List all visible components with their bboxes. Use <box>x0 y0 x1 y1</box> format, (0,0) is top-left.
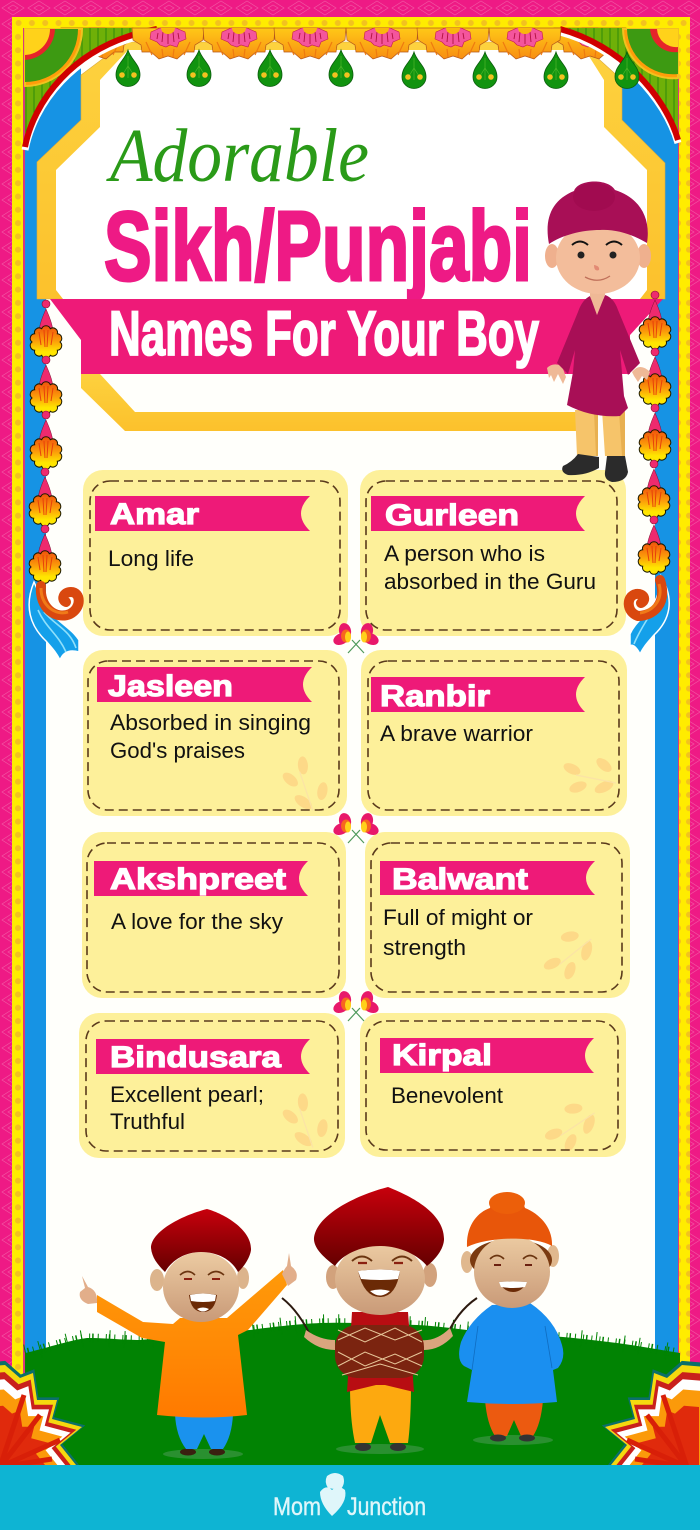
logo word: Junction: Junction <box>347 1493 426 1521</box>
trousers <box>485 1400 543 1436</box>
corner sunburst flowers <box>0 1361 700 1467</box>
hands <box>547 364 566 384</box>
name card: Bindusara: Bindusara <box>110 1041 281 1074</box>
name card: Jasleen: Absorbed in singing <box>110 710 311 735</box>
name card: Bindusara: Truthful <box>110 1109 185 1134</box>
vest <box>347 1312 414 1392</box>
name card: Balwant <box>365 832 630 998</box>
title frame <box>37 42 665 431</box>
shadow <box>336 1444 424 1454</box>
footer band <box>0 1465 700 1530</box>
name card: Bindusara <box>79 1013 345 1158</box>
mouth <box>499 1282 527 1292</box>
boy in orange kurta pointing up <box>80 1209 297 1459</box>
name card: Jasleen: Jasleen <box>108 670 233 703</box>
right scroll ornament <box>629 576 669 654</box>
end marigolds behind the arch <box>61 28 626 59</box>
name card: Jasleen <box>83 650 347 817</box>
name card: Ranbir: A brave warrior <box>380 721 534 746</box>
ears <box>461 1251 473 1273</box>
name card: Kirpal <box>360 1013 626 1160</box>
title <box>50 114 663 374</box>
name card: Amar: Long life <box>108 546 194 571</box>
title line: Adorable: Adorable <box>105 114 369 198</box>
ears <box>326 1265 340 1289</box>
flower dividers between cards <box>331 622 381 1021</box>
shoes <box>180 1448 196 1456</box>
name card: Kirpal: Benevolent <box>391 1083 504 1108</box>
eyes and brows <box>352 1256 412 1261</box>
logo word: Mom: Mom <box>273 1493 321 1521</box>
name card: Gurleen: absorbed in the Guru <box>384 569 596 594</box>
name card: Amar: Amar <box>110 498 199 531</box>
name card: Balwant: Full of might or <box>383 905 533 930</box>
name card: Akshpreet: Akshpreet <box>110 863 286 896</box>
grass field <box>25 1323 680 1470</box>
trousers <box>175 1414 233 1449</box>
neck <box>590 285 606 315</box>
shadow <box>473 1435 553 1445</box>
name card: Akshpreet <box>82 832 346 998</box>
ears <box>150 1269 164 1291</box>
eyes and brows <box>578 252 584 258</box>
name card: Kirpal: Kirpal <box>392 1039 492 1072</box>
eyes and brows <box>180 1272 224 1275</box>
face <box>163 1252 239 1322</box>
name card: Gurleen: A person who is <box>384 541 545 566</box>
mouth <box>358 1270 400 1297</box>
mouth <box>189 1294 217 1312</box>
arms <box>304 1328 453 1350</box>
name card: Akshpreet: A love for the sky <box>111 909 284 934</box>
hair <box>470 1239 552 1281</box>
hanging green leaves <box>116 50 639 88</box>
name card: Gurleen <box>360 470 626 636</box>
left hanging garland <box>29 300 62 583</box>
nose and smile <box>594 265 599 270</box>
name card: Balwant: strength <box>383 935 466 960</box>
name card: Balwant: Balwant <box>392 863 528 896</box>
name card: Ranbir <box>361 650 627 816</box>
name card: Bindusara: Excellent pearl; <box>110 1082 264 1107</box>
shadow <box>163 1449 243 1459</box>
kurta with raised arms <box>97 1270 287 1418</box>
turban <box>548 181 648 244</box>
right flower <box>602 1361 700 1467</box>
boy in blue kurta <box>459 1192 563 1445</box>
name card: Gurleen: Gurleen <box>385 499 519 532</box>
sticks <box>282 1298 477 1341</box>
name card: Jasleen: God's praises <box>110 738 245 763</box>
drum <box>335 1325 424 1378</box>
MomJunction logo <box>273 1473 426 1521</box>
hands <box>80 1276 97 1304</box>
kurta <box>459 1303 563 1404</box>
face <box>335 1243 425 1315</box>
ribbon banner <box>50 299 663 374</box>
title line: Sikh/Punjabi: Sikh/Punjabi <box>104 191 532 301</box>
boy playing dhol drum <box>282 1187 477 1454</box>
shoes <box>490 1434 506 1442</box>
right hanging garland <box>638 291 671 574</box>
turban <box>467 1198 552 1247</box>
kurta <box>557 295 640 416</box>
logo icon: mother and child heart <box>320 1473 345 1516</box>
ears <box>545 244 559 268</box>
left scroll ornament <box>29 582 79 660</box>
name card: Amar <box>83 470 348 636</box>
left flower <box>0 1361 85 1467</box>
eyes and brows <box>490 1256 537 1259</box>
name card: Ranbir: Ranbir <box>380 680 490 713</box>
trousers <box>350 1385 411 1443</box>
face <box>474 1236 550 1308</box>
face <box>556 222 640 294</box>
shoes <box>355 1443 371 1451</box>
trousers <box>575 410 625 456</box>
turban <box>314 1187 444 1266</box>
arch: green corner spandrels with mandalas <box>25 28 678 150</box>
shoes <box>562 454 599 475</box>
top marigold garland <box>132 28 561 59</box>
boy with maroon turban <box>545 181 651 482</box>
turban <box>151 1209 251 1272</box>
